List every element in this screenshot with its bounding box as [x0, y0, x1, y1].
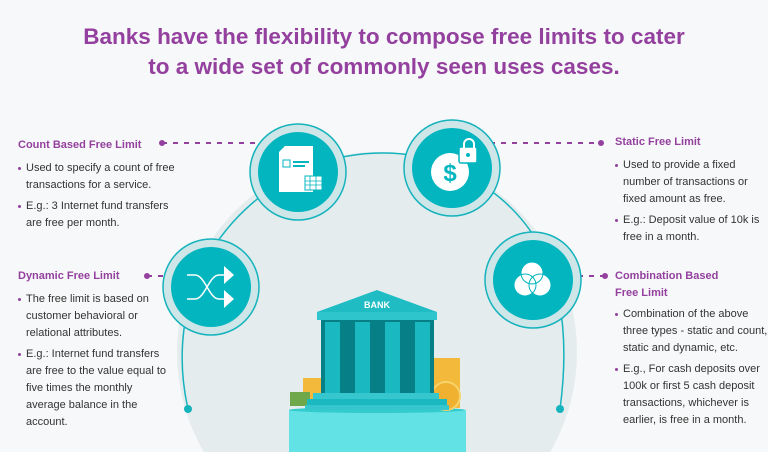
icon: dollar lock [404, 120, 500, 216]
text: dynamic [18, 270, 166, 428]
title: Banks have the flexibility to compose free limits to cater [83, 24, 685, 49]
text: combination: Combination Based [615, 270, 718, 282]
text: combination: Free Limit [615, 287, 668, 299]
text: static [615, 136, 759, 243]
title [83, 24, 685, 79]
text: count based: E.g.: 3 Internet fund transfers are free per month. [26, 200, 168, 229]
text: dynamic: Dynamic Free Limit [18, 270, 119, 282]
text: dynamic: E.g.: Internet fund transfers are free to the value equal to five times the monthly average balance in the account. [26, 348, 166, 428]
icon: dollar lock: $ [443, 160, 457, 187]
dotted connectors [147, 143, 605, 276]
text: combination: Combination of the above three types - static and count, static and dynamic, etc. [623, 308, 767, 354]
text: count based [18, 139, 175, 229]
text: count based: Count Based Free Limit [18, 139, 141, 151]
arc line [182, 153, 564, 409]
text: static: Static Free Limit [615, 136, 701, 148]
icon: shuffle [163, 239, 259, 335]
bank [289, 290, 466, 452]
text: combination [615, 270, 767, 426]
text: dynamic: The free limit is based on customer behavioral or relational attributes. [26, 293, 149, 339]
text: count based: Used to specify a count of free transactions for a service. [26, 162, 175, 191]
text: static: Used to provide a fixed number of transactions or fixed amount as free. [623, 159, 748, 205]
text: combination: E.g., For cash deposits over 100k or first 5 cash deposit transactions, whichever is earlier, is free in a month. [623, 363, 760, 426]
title: to a wide set of commonly seen uses cases. [148, 54, 620, 79]
icon: venn [485, 232, 581, 328]
text: static: E.g.: Deposit value of 10k is free in a month. [623, 214, 759, 243]
bank: BANK [364, 300, 390, 310]
background disc [177, 152, 577, 452]
icon: count document [250, 124, 346, 220]
